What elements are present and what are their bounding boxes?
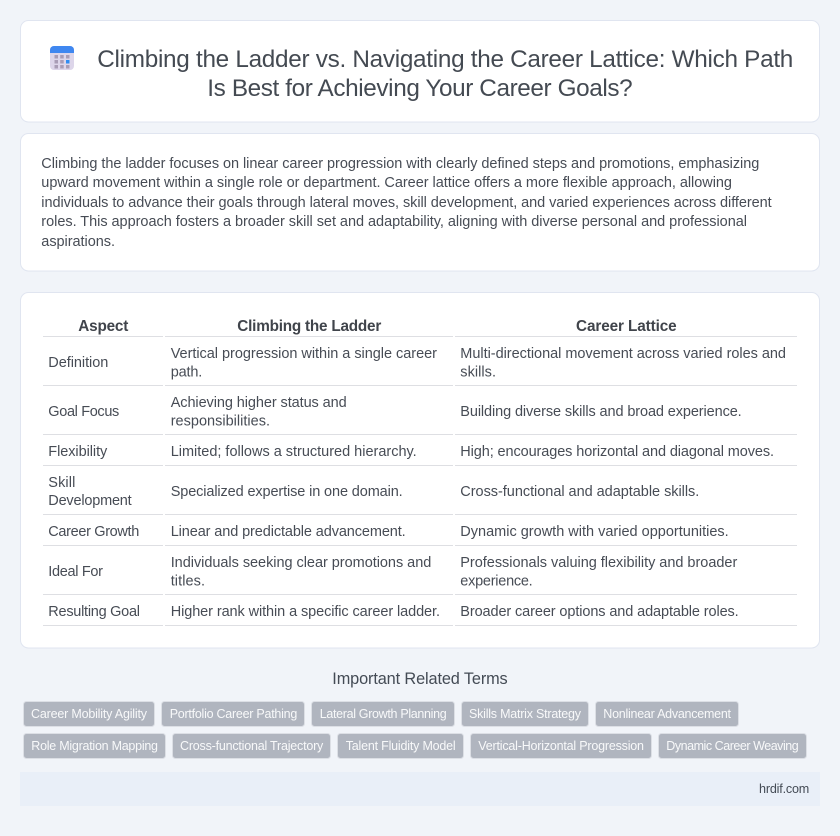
row: ideal for: titles.	[171, 574, 205, 590]
row: definition: path.	[171, 364, 202, 380]
intro paragraph: roles. This approach fosters a broader skill set and adaptability, aligning with diverse personal and professional	[41, 214, 747, 230]
row: definition: Vertical progression within a single career	[171, 346, 437, 362]
table header row: Aspect	[78, 318, 128, 335]
tag: nonlinear advancement	[596, 702, 738, 726]
row: definition: skills.	[460, 364, 496, 380]
tag: dynamic career weaving: Dynamic Career Weaving	[666, 739, 799, 753]
intro paragraph	[41, 156, 772, 250]
tag: dynamic career weaving	[658, 734, 806, 758]
row: ideal for	[48, 555, 737, 590]
row: flexibility	[48, 444, 774, 460]
row: skill development: Cross-functional and adaptable skills.	[460, 484, 699, 500]
row: resulting goal	[48, 604, 739, 620]
row: goal focus: Achieving higher status and	[171, 395, 347, 411]
table header row	[78, 318, 677, 335]
intro paragraph: aspirations.	[41, 234, 115, 250]
row: ideal for: Ideal For	[48, 564, 103, 580]
tag: lateral growth planning: Lateral Growth Planning	[320, 707, 447, 721]
tag: role migration mapping	[24, 734, 166, 758]
title: Climbing the Ladder vs. Navigating the Career Lattice: Which Path	[97, 46, 793, 73]
tag: career mobility agility: Career Mobility Agility	[31, 707, 148, 721]
tag: talent fluidity model: Talent Fluidity Model	[346, 739, 456, 753]
tag: cross-functional trajectory	[172, 734, 330, 758]
tag: lateral growth planning	[312, 702, 454, 726]
tag: career mobility agility	[24, 702, 154, 726]
intro paragraph: upward movement within a single role or department. Career lattice offers a more flexible approach, allowing	[41, 175, 732, 191]
row: skill development: Skill	[48, 475, 75, 491]
row: ideal for: Individuals seeking clear promotions and	[171, 555, 431, 571]
row: skill development	[48, 475, 699, 509]
row: goal focus	[48, 395, 742, 430]
icon: calendar	[50, 46, 74, 70]
row: career growth: Linear and predictable advancement.	[171, 524, 406, 540]
table card	[20, 292, 820, 648]
intro paragraph: individuals to advance their goals through lateral moves, skill development, and varied experiences across different	[41, 195, 772, 211]
row: career growth: Dynamic growth with varied opportunities.	[460, 524, 729, 540]
tag: portfolio career pathing: Portfolio Career Pathing	[170, 707, 297, 721]
row: definition: Multi-directional movement across varied roles and	[460, 346, 786, 362]
footer bar	[20, 772, 820, 806]
tag: skills matrix strategy: Skills Matrix Strategy	[469, 707, 582, 721]
row: definition	[48, 346, 786, 380]
tag: vertical-horizontal progression	[470, 734, 652, 758]
row: career growth	[48, 524, 729, 540]
row: flexibility: Flexibility	[48, 444, 108, 460]
row: goal focus: Goal Focus	[48, 404, 119, 420]
row: resulting goal: Higher rank within a specific career ladder.	[171, 604, 440, 620]
row: flexibility: High; encourages horizontal and diagonal moves.	[460, 444, 774, 460]
row: career growth: Career Growth	[48, 524, 139, 540]
tag: portfolio career pathing	[162, 702, 304, 726]
tag: skills matrix strategy	[462, 702, 588, 726]
intro card	[20, 134, 820, 271]
row: resulting goal: Resulting Goal	[48, 604, 140, 620]
row: skill development: Specialized expertise in one domain.	[171, 484, 403, 500]
footer source label: hrdif.com	[759, 782, 809, 796]
title: Is Best for Achieving Your Career Goals?	[207, 75, 633, 102]
tag list	[24, 702, 806, 758]
title	[97, 46, 793, 102]
row: ideal for: Professionals valuing flexibility and broader	[460, 555, 737, 571]
tag: vertical-horizontal progression: Vertical-Horizontal Progression	[478, 739, 644, 753]
row: definition: Definition	[48, 355, 108, 371]
row: flexibility: Limited; follows a structured hierarchy.	[171, 444, 417, 460]
footer	[20, 772, 820, 806]
row: goal focus: responsibilities.	[171, 414, 270, 430]
row: goal focus: Building diverse skills and broad experience.	[460, 404, 742, 420]
panel: comparison table	[20, 292, 820, 648]
header card	[20, 20, 820, 122]
row: resulting goal: Broader career options and adaptable roles.	[460, 604, 739, 620]
tag: nonlinear advancement: Nonlinear Advancement	[603, 707, 732, 721]
row: skill development: Development	[48, 493, 132, 509]
panel: header	[20, 20, 820, 122]
table header row: Career Lattice	[576, 318, 677, 335]
table header row: Climbing the Ladder	[237, 318, 381, 335]
panel: introduction	[20, 134, 820, 271]
tag: role migration mapping: Role Migration Mapping	[31, 739, 158, 753]
intro paragraph: Climbing the ladder focuses on linear career progression with clearly defined steps and promotions, emphasizing	[41, 156, 759, 172]
tag: cross-functional trajectory: Cross-functional Trajectory	[180, 739, 324, 753]
heading: important related terms: Important Related Terms	[332, 670, 508, 688]
tag: talent fluidity model	[338, 734, 464, 758]
row: ideal for: experience.	[460, 574, 533, 590]
